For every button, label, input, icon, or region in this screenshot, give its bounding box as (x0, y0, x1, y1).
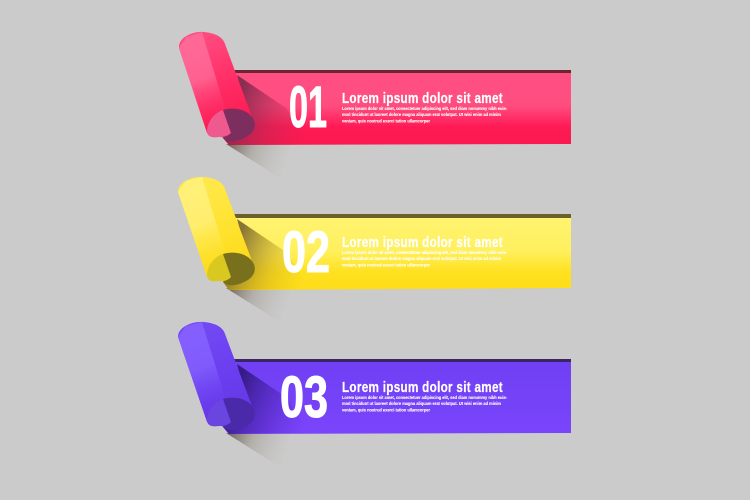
banner 01 (223, 70, 571, 145)
body text 01: mod tincidunt ut laoreet dolore magna aliquam erat volutpat. Ut wisi enim ad minim (342, 112, 501, 117)
body text 02: mod tincidunt ut laoreet dolore magna aliquam erat volutpat. Ut wisi enim ad minim (342, 256, 501, 261)
body text 02: veniam, quis nostrud exerci tation ullamcorper (342, 262, 430, 268)
shadow below banner 02 (226, 288, 291, 322)
number 02: 02 (282, 220, 330, 285)
heading 02: Lorem ipsum dolor sit amet (342, 234, 503, 250)
roll 01 (179, 32, 255, 141)
body text 02 (342, 250, 507, 268)
shadow below banner 01 (226, 144, 291, 178)
panel: step 03 (178, 322, 571, 467)
panel: step 02 (178, 177, 571, 322)
shadow below banner 03 (226, 433, 291, 467)
body text 01 (342, 106, 507, 124)
heading 01: Lorem ipsum dolor sit amet (342, 90, 503, 106)
number 03: 03 (280, 365, 328, 430)
body text 01: Lorem ipsum dolor sit amet, consectetuer adipiscing elit, sed diam nonummy nibh euis- (342, 106, 507, 111)
panel: step 01 (179, 32, 571, 178)
body text 02: Lorem ipsum dolor sit amet, consectetuer adipiscing elit, sed diam nonummy nibh euis- (342, 250, 507, 255)
body text 03: veniam, quis nostrud exerci tation ullamcorper (342, 408, 430, 412)
body text 03: mod tincidunt ut laoreet dolore magna aliquam erat volutpat. Ut wisi enim ad minim (342, 401, 501, 406)
roll 02 (178, 177, 255, 285)
body text 03: Lorem ipsum dolor sit amet, consectetuer adipiscing elit, sed diam nonummy nibh euis- (342, 395, 507, 400)
roll 03 (178, 322, 255, 430)
banner 02 (223, 214, 571, 290)
banner 03 (223, 359, 571, 434)
body text 03 (342, 395, 507, 412)
body text 01: veniam, quis nostrud exerci tation ullamcorper (342, 118, 430, 124)
heading 03: Lorem ipsum dolor sit amet (342, 379, 503, 395)
number 01: 01 (289, 75, 327, 140)
